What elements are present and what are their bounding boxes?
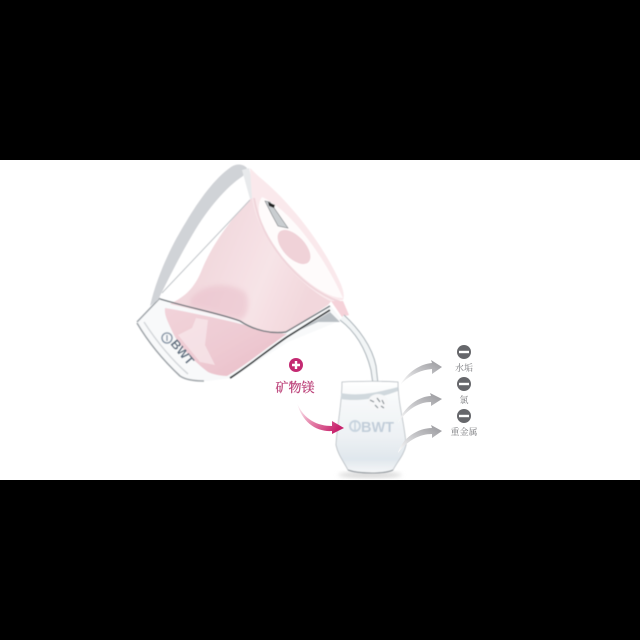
pitcher indicator	[265, 201, 288, 228]
glass body	[336, 381, 406, 473]
glass splash	[368, 394, 388, 410]
minus icon: heavy metals	[457, 409, 471, 423]
pitcher lower pale patch	[178, 318, 215, 365]
pitcher handle	[150, 164, 247, 306]
label: minerals magnesium: 矿物镁	[275, 380, 315, 395]
label: chlorine: 氯	[459, 394, 469, 405]
grey arrow: chlorine	[398, 393, 442, 423]
pitcher lid pink lip	[254, 198, 340, 302]
pitcher lid opening	[272, 224, 316, 270]
pitcher glass wall	[162, 200, 250, 293]
minus icon: limescale	[457, 345, 471, 359]
label: limescale: 水垢	[455, 362, 473, 373]
pitcher dark lower edge	[230, 310, 330, 378]
white background band	[0, 160, 640, 480]
glass logo: BWT	[361, 420, 394, 436]
glass water surface	[341, 387, 398, 400]
water pitcher	[137, 164, 349, 381]
glass base line	[348, 470, 393, 473]
plus icon: magnesium	[289, 358, 303, 372]
drinking glass	[336, 381, 406, 478]
water stream	[340, 315, 378, 384]
pitcher pink filter upper	[170, 197, 332, 332]
pitcher water line	[160, 299, 330, 333]
label: heavy metals: 重金属	[450, 426, 478, 437]
pitcher lid outer rim	[250, 168, 344, 301]
pitcher logo: BWT	[168, 337, 197, 368]
pitcher handle strut	[242, 168, 256, 199]
pitcher spout sparkle	[300, 312, 340, 330]
pitcher filter darker blotch	[190, 285, 248, 320]
minus icon: chlorine	[457, 377, 471, 391]
pitcher spout	[331, 301, 349, 317]
grey arrow: heavy metals	[398, 425, 442, 453]
pitcher base inner line	[144, 322, 188, 374]
pitcher base outline	[137, 298, 204, 381]
glass shadow	[338, 472, 402, 478]
pitcher pink filter lower	[165, 308, 287, 376]
pitcher lid white top	[259, 197, 343, 298]
grey arrow: limescale	[400, 360, 442, 385]
magenta arrow	[297, 403, 344, 434]
pitcher glass base	[137, 298, 342, 381]
